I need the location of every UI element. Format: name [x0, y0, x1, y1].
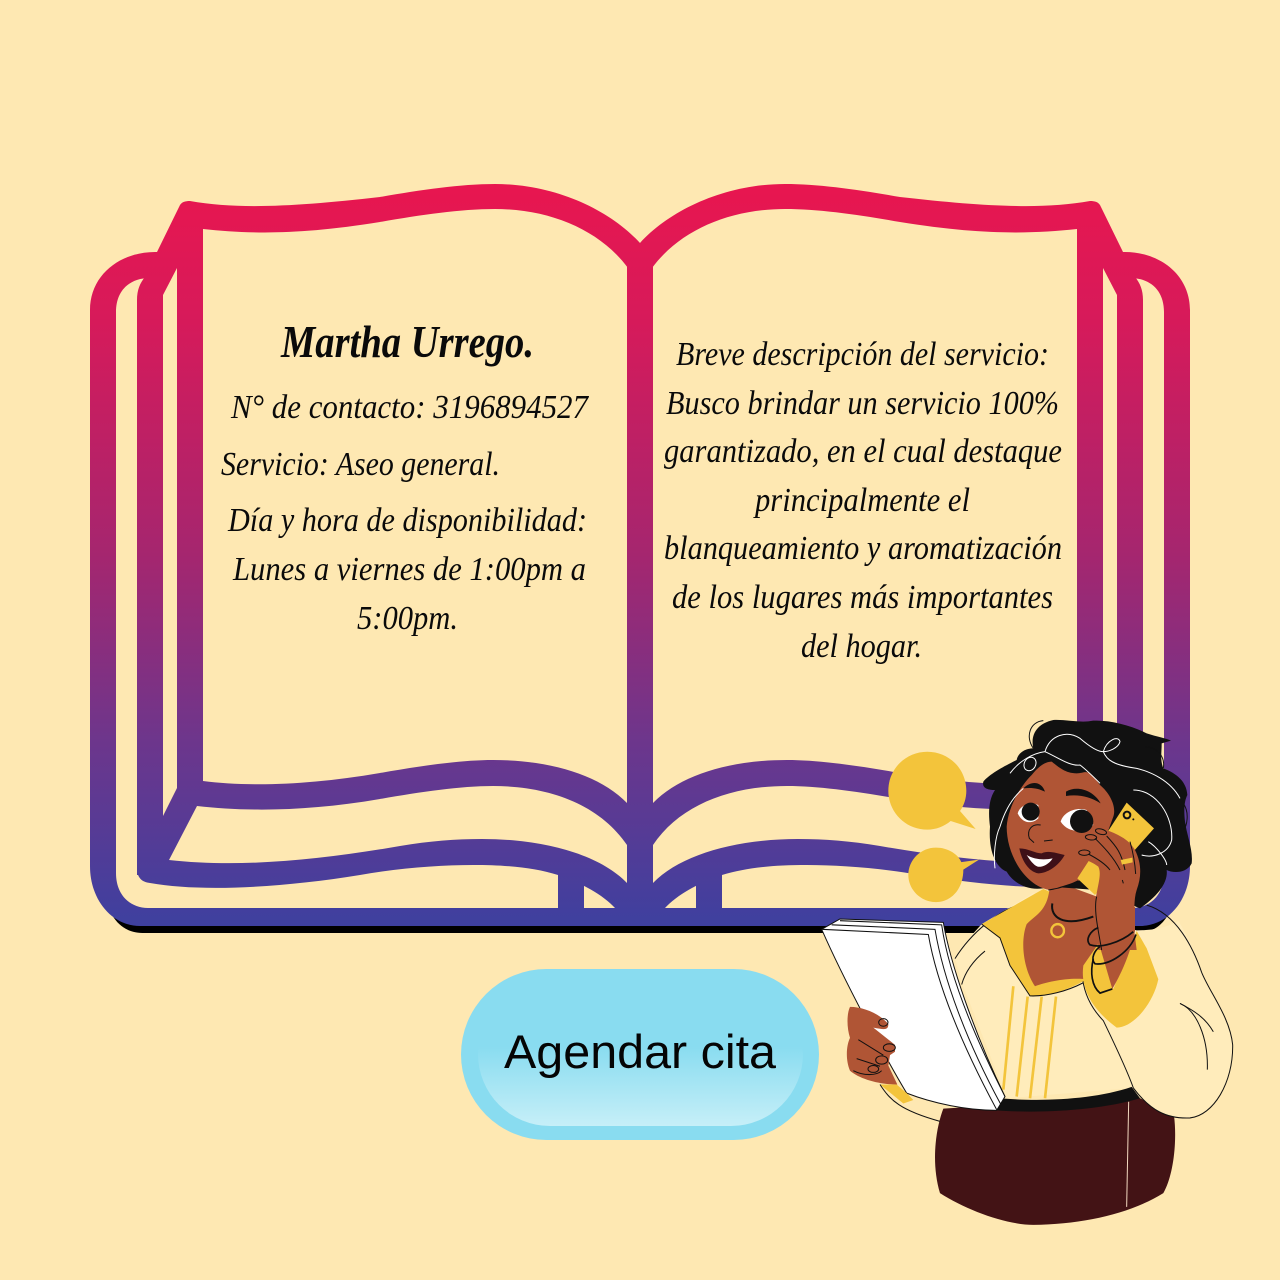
hair [983, 720, 1192, 908]
hair highlights [994, 734, 1180, 868]
necklace [1051, 903, 1093, 937]
forearm [1095, 907, 1135, 989]
bracelets [1088, 928, 1136, 993]
jaw line [1048, 881, 1078, 890]
mouth [1019, 848, 1065, 873]
skirt [935, 1097, 1175, 1225]
availability: Lunes a viernes de 1:00pm a [232, 551, 586, 588]
phone [1077, 803, 1154, 895]
blouse [955, 893, 1233, 1118]
book illustration [90, 184, 1190, 933]
right page text: service description: de los lugares más importantes [672, 579, 1053, 616]
neck and chest [1023, 879, 1112, 989]
right page text: service description: principalmente el [753, 482, 970, 519]
right page text: service description: blanqueamiento y aromatización [664, 530, 1062, 567]
sleeve cuff [1083, 931, 1158, 1028]
icon: small speech bubble [908, 848, 979, 902]
head, phone and raised hand [983, 720, 1192, 950]
eyes [1018, 803, 1093, 833]
belt [997, 1087, 1140, 1112]
holding hand [847, 1007, 940, 1121]
body and bubbles [888, 752, 1233, 1225]
face [1007, 762, 1114, 890]
arm details and papers [822, 903, 1136, 1121]
right page text: service description: Busco brindar un servicio 100% [666, 385, 1059, 422]
button: Agendar cita: Agendar cita [504, 1025, 777, 1078]
hair wisps [1029, 721, 1187, 830]
papers [822, 919, 1005, 1110]
availability [227, 502, 587, 637]
icon: large speech bubble [888, 752, 976, 830]
contact number: N° de contacto: 3196894527 [230, 389, 590, 426]
right page text: service description: Breve descripción del servicio: [676, 336, 1049, 373]
service: Servicio: Aseo general. [221, 446, 500, 483]
eyebrows [1023, 783, 1101, 803]
right page text: service description [664, 336, 1062, 665]
ring [1121, 858, 1133, 865]
blouse stripes [1003, 986, 1056, 1098]
raised hand [1077, 828, 1140, 950]
button: Agendar cita [461, 969, 819, 1140]
collar [982, 889, 1100, 996]
left page text: contact details [221, 316, 590, 637]
availability: 5:00pm. [357, 600, 458, 637]
right page text: service description: del hogar. [801, 628, 922, 665]
nose [1029, 825, 1053, 843]
illustration: woman on the phone holding papers [822, 720, 1233, 1225]
availability: Día y hora de disponibilidad: [227, 502, 587, 539]
blouse outlines [955, 905, 1233, 1118]
name heading: Martha Urrego. [280, 316, 534, 367]
right page text: service description: garantizado, en el cual destaque [664, 433, 1062, 470]
